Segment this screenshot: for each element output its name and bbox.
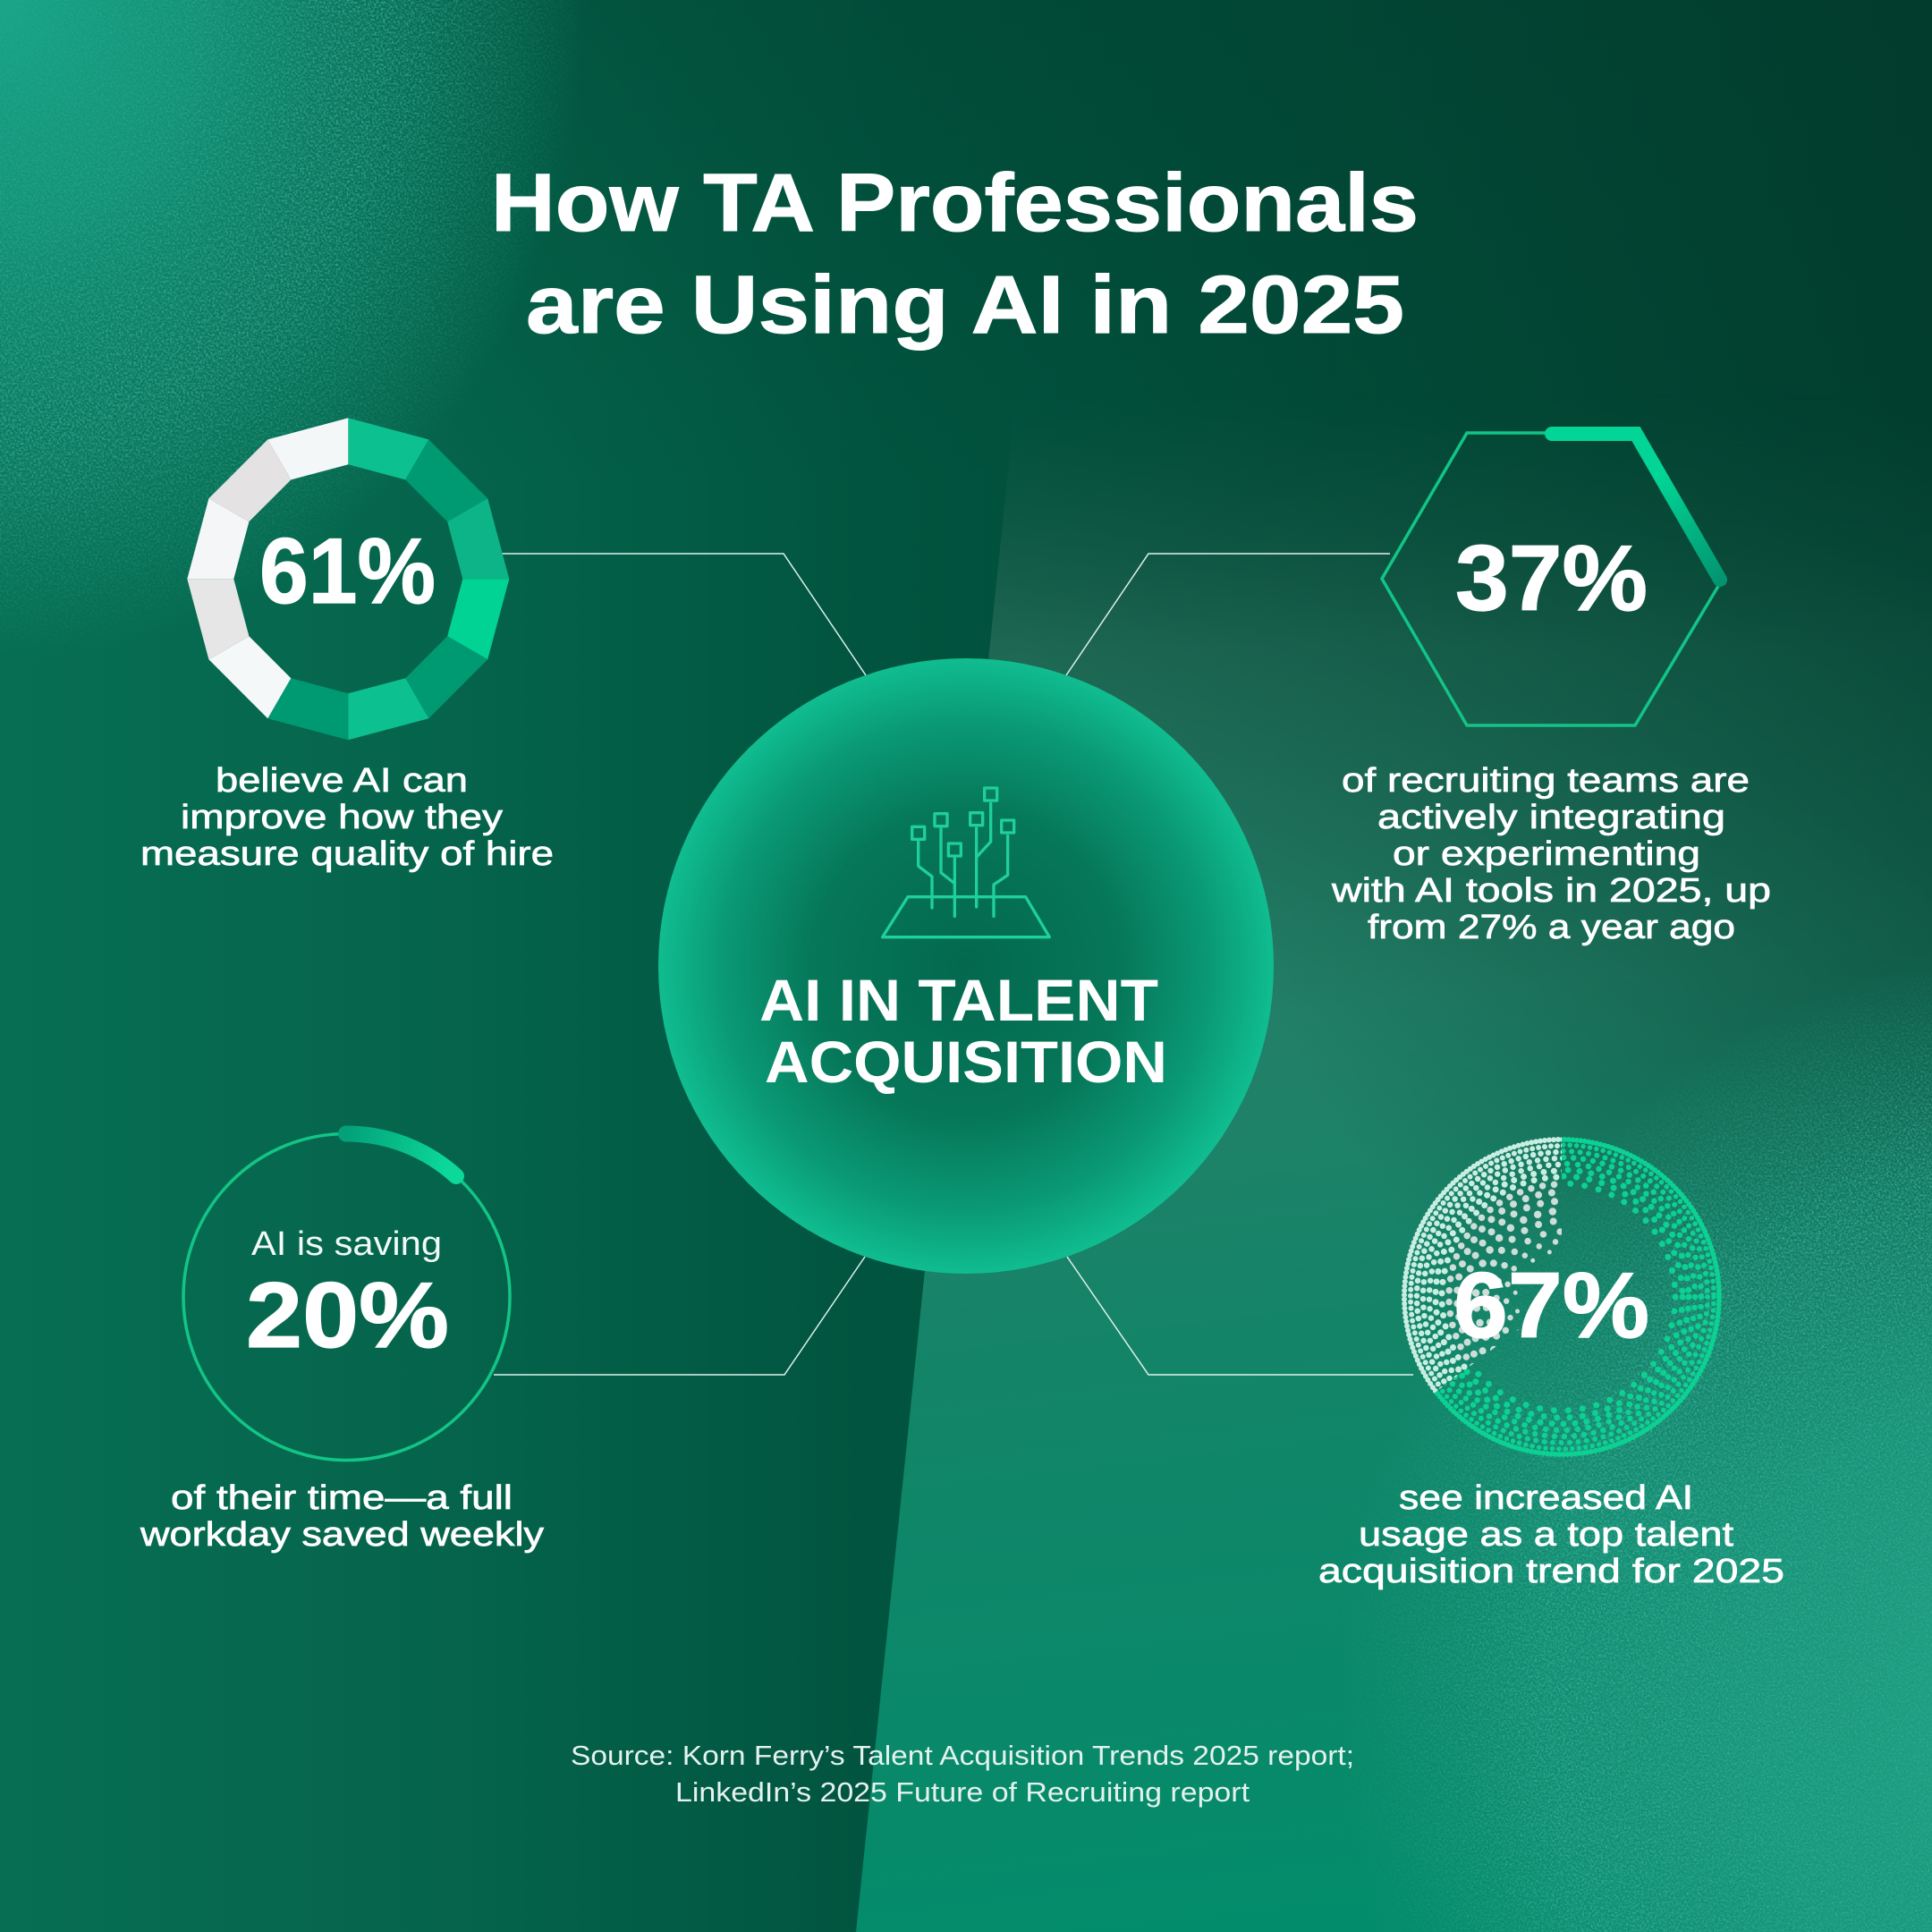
source note bbox=[571, 1740, 1354, 1808]
connector: top right bbox=[1066, 554, 1390, 675]
connector: top left bbox=[500, 554, 866, 675]
chart: hexagon progress bbox=[1382, 433, 1723, 725]
title bbox=[491, 157, 1419, 351]
source note: Source: Korn Ferry’s Talent Acquisition Trends 2025 report; bbox=[571, 1740, 1354, 1771]
panel: 37% stat bbox=[1331, 433, 1771, 946]
background: bottom-right grainy glow bbox=[1367, 979, 1932, 1932]
caption: or experimenting bbox=[1393, 835, 1700, 873]
caption: improve how they bbox=[181, 799, 503, 836]
hub heading: AI IN TALENT bbox=[759, 967, 1158, 1033]
title: How TA Professionals bbox=[491, 157, 1419, 249]
chart: dodecagon ring 61% bbox=[187, 418, 509, 740]
caption: of their time—a full bbox=[171, 1479, 513, 1517]
caption: see increased AI bbox=[1399, 1479, 1693, 1517]
stat number: 20% bbox=[246, 1264, 449, 1368]
caption: usage as a top talent bbox=[1359, 1516, 1734, 1554]
caption: believe AI can bbox=[216, 762, 468, 800]
connector: bottom right bbox=[1067, 1257, 1413, 1375]
title: are Using AI in 2025 bbox=[526, 259, 1404, 351]
caption: from 27% a year ago bbox=[1368, 909, 1735, 946]
background: lighter right panel bbox=[856, 394, 1932, 1932]
caption: workday saved weekly bbox=[140, 1516, 544, 1554]
caption: with AI tools in 2025, up bbox=[1331, 872, 1771, 910]
caption bbox=[140, 1479, 544, 1554]
panel: 20% stat bbox=[140, 1133, 544, 1554]
caption bbox=[1331, 762, 1771, 946]
stat number: 67% bbox=[1453, 1254, 1649, 1358]
stat number: 61% bbox=[259, 520, 436, 623]
icon: circuit tree on platform bbox=[883, 788, 1049, 937]
stat number: 37% bbox=[1455, 527, 1648, 631]
chart: dotted ring bbox=[1404, 1140, 1719, 1454]
connector: bottom left bbox=[494, 1257, 865, 1375]
hub circle bbox=[658, 658, 1274, 1274]
panel: 61% stat bbox=[140, 418, 554, 873]
caption: acquisition trend for 2025 bbox=[1318, 1553, 1784, 1590]
hub heading bbox=[759, 967, 1167, 1095]
caption: of recruiting teams are bbox=[1342, 762, 1750, 800]
caption bbox=[1318, 1479, 1784, 1590]
hub heading: ACQUISITION bbox=[765, 1029, 1167, 1095]
panel: 67% stat bbox=[1318, 1140, 1784, 1590]
caption: measure quality of hire bbox=[140, 835, 554, 873]
caption: actively integrating bbox=[1377, 799, 1725, 836]
background: top-left grainy glow bbox=[0, 0, 572, 634]
caption bbox=[140, 762, 554, 873]
source note: LinkedIn’s 2025 Future of Recruiting report bbox=[675, 1776, 1250, 1808]
panel: central hub bbox=[658, 658, 1274, 1274]
chart: circle progress bbox=[183, 1133, 510, 1460]
lead-in text: AI is saving bbox=[251, 1225, 442, 1263]
